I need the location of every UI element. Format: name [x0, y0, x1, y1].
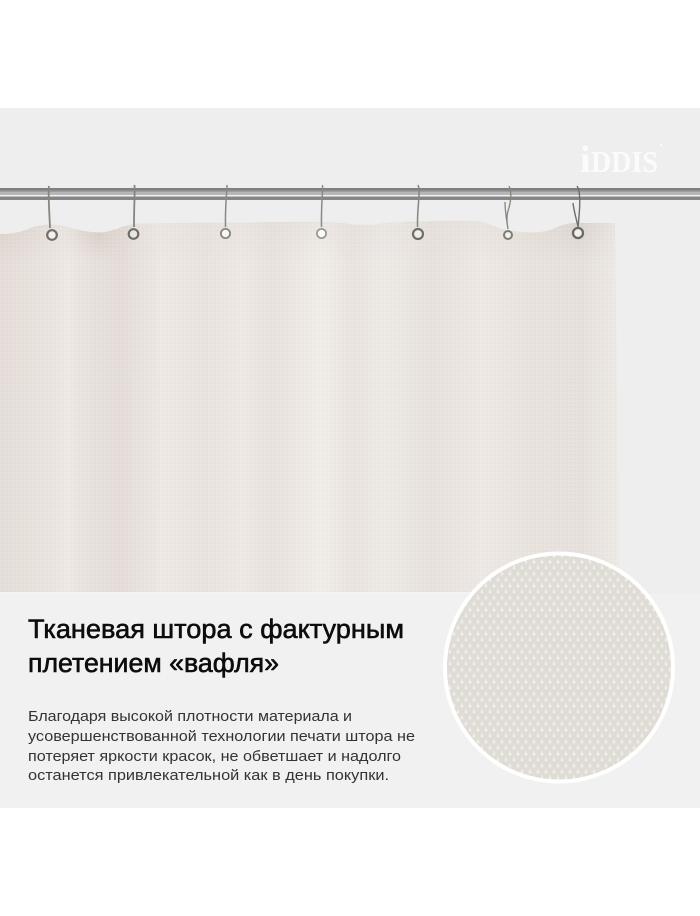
hook 3	[221, 185, 230, 238]
hook 1	[47, 186, 57, 240]
body text: потеряет яркости красок, не обветшает и надолго	[28, 748, 401, 765]
photo background	[0, 108, 700, 594]
curtain rod	[0, 188, 700, 200]
hook 5	[413, 185, 423, 239]
body text: усовершенствованной технологии печати штора не	[28, 728, 415, 745]
curtain	[0, 221, 619, 594]
heading: Тканевая штора с фактурным	[28, 614, 404, 644]
logo: iddis: DDIS	[591, 144, 658, 179]
body text	[28, 708, 415, 784]
logo: iddis: i	[580, 139, 591, 181]
heading: плетением «вафля»	[28, 648, 279, 678]
body text: останется привлекательной как в день покупки.	[28, 767, 389, 784]
hook 2	[129, 185, 138, 239]
fabric close-up lens	[443, 552, 675, 784]
text panel	[0, 594, 700, 808]
body text: Благодаря высокой плотности материала и	[28, 708, 352, 725]
infographic canvas	[0, 108, 700, 808]
hook 7	[573, 186, 583, 238]
hook 6	[504, 186, 512, 239]
shower hooks and grommets	[47, 185, 583, 240]
heading	[28, 614, 404, 678]
hook 4	[317, 185, 326, 238]
